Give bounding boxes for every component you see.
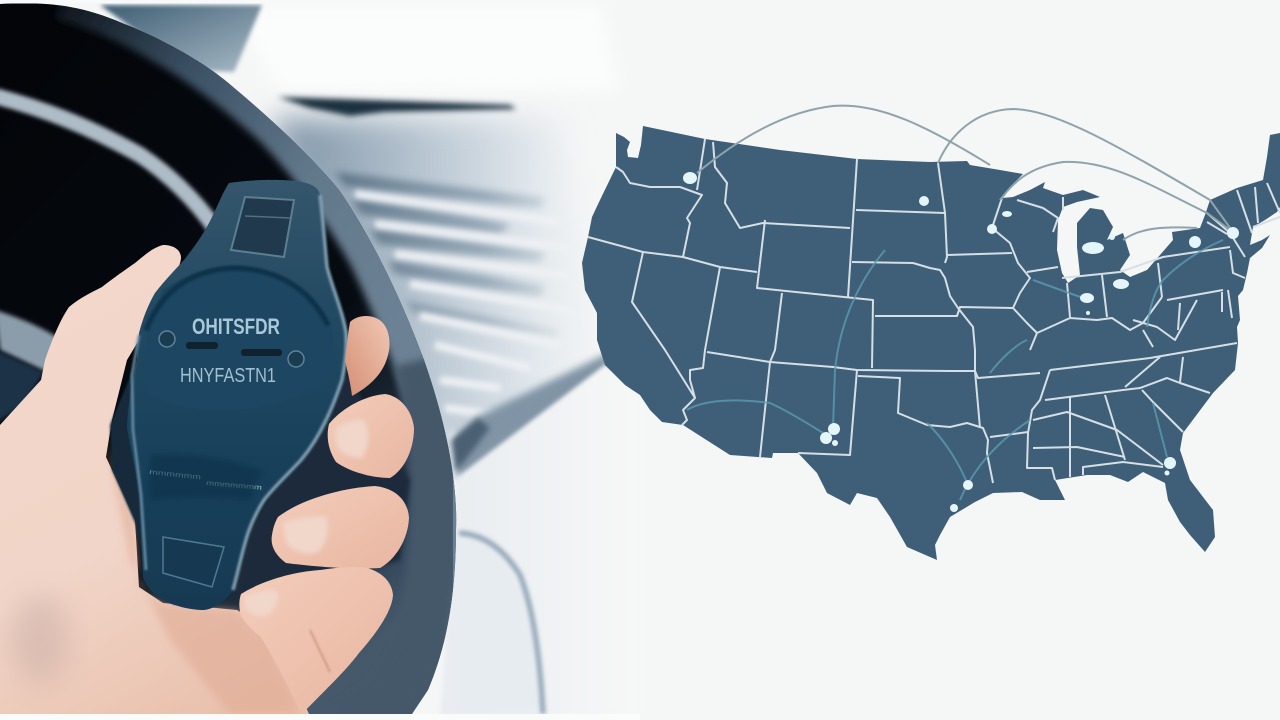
map: route arcs xyxy=(697,106,1233,240)
hub highlight stripe xyxy=(0,96,215,228)
finger shadow behind device xyxy=(232,370,410,600)
map: state borders xyxy=(588,139,1280,483)
palm pink shade xyxy=(106,440,300,714)
finger: ring xyxy=(272,486,409,569)
instrument dial ring xyxy=(459,533,543,714)
device left highlight xyxy=(132,335,146,570)
windshield patch xyxy=(100,5,262,72)
rim lower band xyxy=(393,356,453,714)
map: teal routes xyxy=(687,240,1223,500)
dark wedge beside console xyxy=(455,352,612,480)
map: continental United States xyxy=(582,106,1280,560)
finger: middle xyxy=(328,394,414,478)
device shadow edge xyxy=(110,360,175,605)
hand palm and thumb xyxy=(0,245,310,716)
panel: car interior photo xyxy=(0,0,640,720)
lower spoke shade xyxy=(0,350,44,424)
device window xyxy=(231,197,294,257)
device: handheld breathalyzer xyxy=(110,180,410,610)
wedge shadow xyxy=(452,418,490,472)
device buttons xyxy=(159,331,304,367)
steering wheel xyxy=(0,0,470,720)
device face xyxy=(145,266,338,411)
wheel base xyxy=(0,0,470,720)
map land xyxy=(582,126,1280,560)
light slats xyxy=(355,194,580,440)
fingernails xyxy=(244,420,368,616)
fingers xyxy=(239,316,414,714)
window divider xyxy=(245,216,290,218)
dashboard slat stripes xyxy=(335,172,560,338)
device lower label right: mmmmmmm xyxy=(206,480,262,492)
device label bottom: HNYFASTN1 xyxy=(180,365,276,387)
rim outer band xyxy=(60,0,444,640)
device shaded band xyxy=(150,454,262,500)
device body xyxy=(127,180,347,610)
device label top: OHITSFDR xyxy=(192,314,280,339)
window glare backdrop xyxy=(230,4,620,94)
knuckle crease xyxy=(310,630,330,672)
finger: index xyxy=(345,316,390,396)
instrument dial face xyxy=(456,536,540,714)
device outline highlight xyxy=(233,195,346,590)
dark dashboard strip xyxy=(278,97,516,116)
top edge strip xyxy=(0,0,270,4)
finger: little xyxy=(239,567,393,714)
device base socket xyxy=(163,537,224,587)
bottom white strip xyxy=(0,714,640,720)
lower console xyxy=(440,364,640,716)
face rim xyxy=(146,268,328,330)
map: city nodes xyxy=(683,172,1239,512)
dashboard slats base xyxy=(270,118,600,470)
lower spoke highlight xyxy=(0,310,62,372)
palm crease shadow xyxy=(10,595,70,685)
device lower labels: mmmmmm xyxy=(149,469,201,481)
